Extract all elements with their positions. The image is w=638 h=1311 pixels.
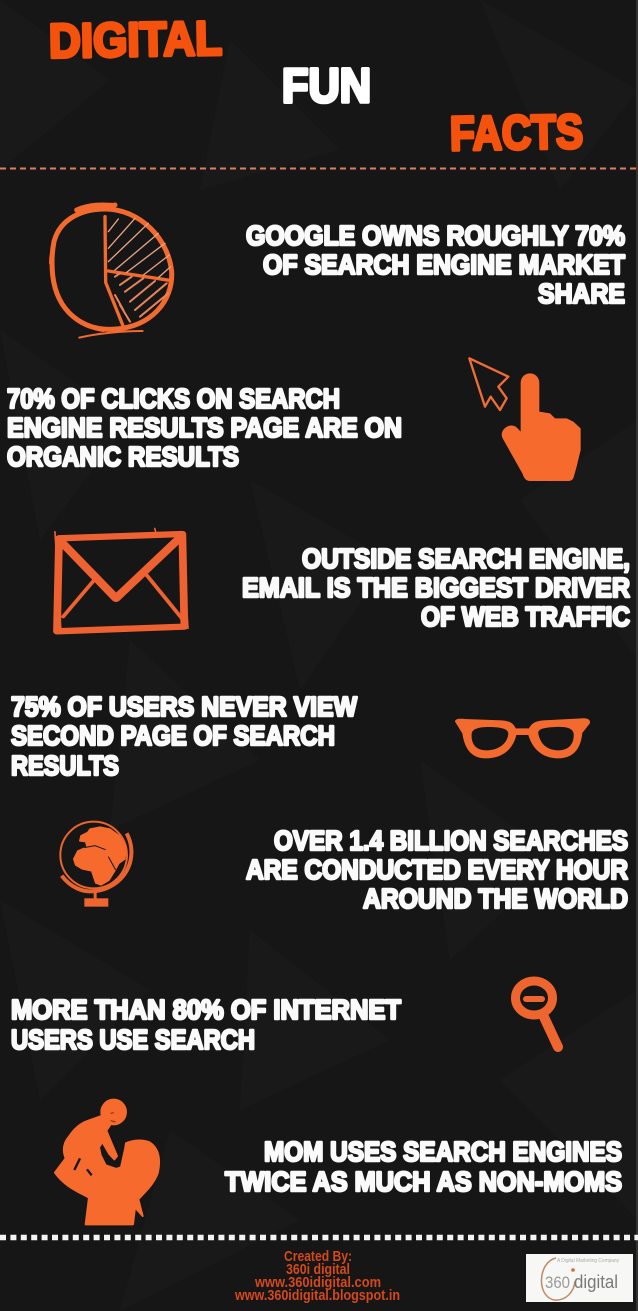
title — [49, 12, 583, 161]
footer credits: www.360idigital.com — [254, 1274, 381, 1291]
logo: 360i digital — [526, 1254, 633, 1302]
footer credits: Created By: — [284, 1248, 352, 1265]
icon: globe — [60, 822, 131, 907]
fact 4 text: 75% OF USERS NEVER VIEW — [11, 691, 357, 722]
fact 2 text: ENGINE RESULTS PAGE ARE ON — [7, 412, 402, 443]
fact 1 text — [246, 220, 625, 309]
icon: pointing hand and cursor — [469, 358, 581, 481]
footer credits: 360i digital — [286, 1261, 350, 1278]
title word: fun: FUN — [282, 60, 371, 113]
icon: pie chart — [50, 205, 172, 338]
fact 7 text — [225, 1136, 622, 1197]
footer credits — [234, 1248, 400, 1304]
fact 6 text — [11, 994, 401, 1055]
icon: glasses — [455, 718, 590, 758]
icon: hand — [502, 373, 581, 481]
icon: mother lifting baby — [55, 1099, 159, 1224]
logo: 360i digital: digital — [574, 1272, 618, 1292]
fact 1 text: SHARE — [538, 278, 625, 309]
fact 3 text — [242, 543, 630, 632]
footer credits: www.360idigital.blogspot.in — [234, 1287, 400, 1304]
fact 4 text — [11, 691, 357, 781]
icon: envelope — [55, 528, 188, 633]
fact 2 text: 70% OF CLICKS ON SEARCH — [7, 383, 340, 414]
title word: facts: FACTS — [450, 106, 583, 161]
icon: cursor arrow — [469, 358, 508, 410]
logo: 360i digital: 360 — [545, 1273, 570, 1292]
fact 4 text: RESULTS — [11, 750, 119, 781]
fact 5 text — [246, 825, 628, 914]
icon: magnifying glass — [516, 981, 558, 1047]
fact 4 text: SECOND PAGE OF SEARCH — [11, 720, 335, 751]
fact 2 text: ORGANIC RESULTS — [7, 441, 239, 472]
logo: 360i digital: A Digital Marketing Company — [557, 1258, 619, 1264]
fact 6 text: USERS USE SEARCH — [11, 1024, 255, 1055]
fact 2 text — [7, 383, 402, 472]
fact 6 text: MORE THAN 80% OF INTERNET — [11, 994, 401, 1025]
title word: digital: DIGITAL — [49, 12, 222, 68]
